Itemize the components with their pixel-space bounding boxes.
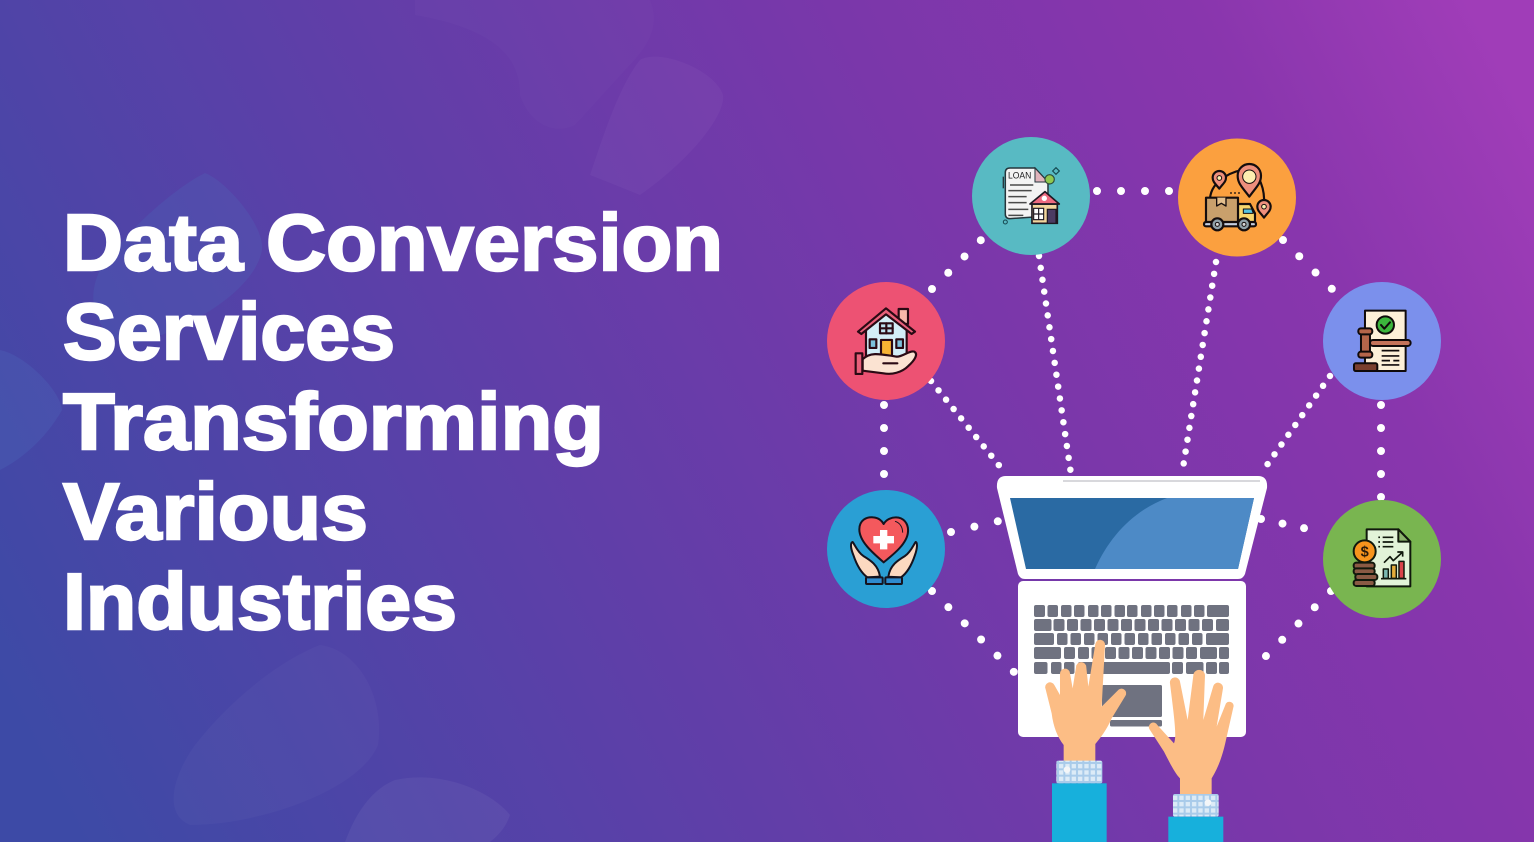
screen reflection xyxy=(1095,498,1254,569)
background blobs xyxy=(0,0,723,842)
dollar sign: $ xyxy=(1361,545,1369,561)
right cuff xyxy=(1173,794,1219,817)
laptop base xyxy=(1018,581,1246,737)
lid highlight line xyxy=(1063,480,1260,482)
loan label: LOAN xyxy=(1008,170,1031,180)
title xyxy=(63,198,723,646)
laptop screen xyxy=(1010,498,1254,569)
circle: loan xyxy=(972,137,1090,255)
icon: heart in hands xyxy=(851,517,917,584)
laptop xyxy=(997,476,1267,737)
laptop lid xyxy=(997,476,1267,579)
circle: logistics xyxy=(1178,138,1296,256)
hands and sleeves xyxy=(1045,640,1234,842)
keyboard xyxy=(1034,605,1229,674)
title: Industries xyxy=(63,557,457,646)
circle: real estate xyxy=(827,282,945,400)
circle: finance xyxy=(1323,500,1441,618)
touchpad xyxy=(1102,685,1162,726)
title: Data Conversion xyxy=(63,198,723,287)
title: Services xyxy=(63,287,395,376)
dotted connector lines xyxy=(884,191,1381,672)
icon: gavel and document xyxy=(1354,311,1411,371)
circle: legal xyxy=(1323,282,1441,400)
icon: delivery truck and pins xyxy=(1204,164,1271,230)
left sleeve xyxy=(1052,783,1107,842)
title: Various xyxy=(63,467,368,556)
left cuff xyxy=(1056,761,1102,783)
title: Transforming xyxy=(63,377,604,466)
right sleeve xyxy=(1168,817,1223,842)
left hand xyxy=(1045,640,1126,762)
icon: house in hand xyxy=(856,308,916,374)
circle: healthcare xyxy=(827,490,945,608)
right hand xyxy=(1149,670,1234,795)
